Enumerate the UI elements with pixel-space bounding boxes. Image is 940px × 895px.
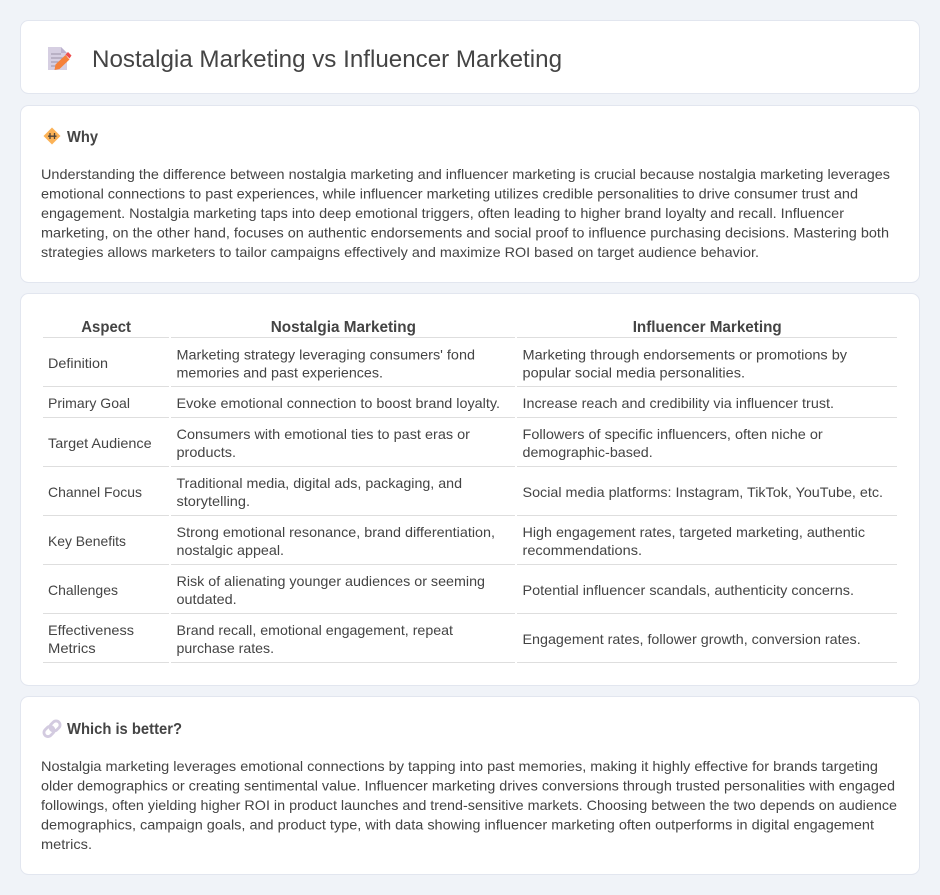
table row: channel focus: Channel Focus (48, 484, 142, 500)
table header row: Influencer Marketing (633, 319, 782, 336)
table row: key benefits: Key Benefits (48, 533, 126, 549)
table row: key benefits (43, 524, 897, 565)
table row: challenges: Challenges (48, 582, 118, 598)
table row: channel focus: storytelling. (176, 493, 250, 509)
table row: channel focus: Traditional media, digital ads, packaging, and (176, 475, 462, 491)
panel: why (20, 106, 920, 282)
table row: effectiveness metrics: Effectiveness (48, 622, 134, 638)
table row: definition: Marketing through endorsements or promotions by (522, 346, 847, 362)
table row: target audience: products. (176, 444, 236, 460)
table row: definition: memories and past experiences. (176, 364, 383, 380)
table row: challenges (43, 573, 897, 614)
table row: target audience: Target Audience (48, 435, 152, 451)
text block: why paragraph: marketing, on the other hand, focuses on authentic endorsements and social proof to influence purchasing decisions. Mastering both (41, 224, 889, 240)
text block: why paragraph: emotional connections to past experiences, while influencer marketing utilizes credible personalities to drive consumer trust and (41, 186, 858, 202)
table row: definition: Definition (48, 355, 108, 371)
text block: which is better paragraph: followings, often yielding higher ROI in product launches and trend-sensitive markets. Choosing between the two depends on audience (41, 797, 897, 813)
table row: key benefits: Strong emotional resonance, brand differentiation, (176, 524, 495, 540)
table row: effectiveness metrics: Engagement rates, follower growth, conversion rates. (522, 631, 861, 647)
table row: target audience: demographic-based. (522, 444, 653, 460)
table row: primary goal (43, 395, 897, 418)
table row: effectiveness metrics: Metrics (48, 640, 96, 656)
table row: effectiveness metrics: Brand recall, emotional engagement, repeat (176, 622, 453, 638)
table row: effectiveness metrics: purchase rates. (176, 640, 274, 656)
table row: channel focus: Social media platforms: Instagram, TikTok, YouTube, etc. (522, 484, 883, 500)
table row: definition (43, 346, 897, 387)
panel: comparison table (20, 294, 920, 686)
table row: primary goal: Primary Goal (48, 395, 130, 411)
table row: key benefits: High engagement rates, targeted marketing, authentic (522, 524, 865, 540)
text block: why paragraph: strategies allows marketers to tailor campaigns effectively and maximize ROI based on target audience behavior. (41, 244, 759, 260)
table header row: Nostalgia Marketing (271, 319, 416, 336)
panel: title header (20, 20, 920, 94)
text block: why paragraph: Understanding the difference between nostalgia marketing and influencer marketing is crucial because nostalgia marketing leverages (41, 166, 890, 182)
table row: primary goal: Increase reach and credibility via influencer trust. (522, 395, 834, 411)
table row: primary goal: Evoke emotional connection to boost brand loyalty. (176, 395, 500, 411)
icon: chain link (42, 719, 62, 738)
table row: definition: popular social media personalities. (522, 364, 745, 380)
text block: which is better paragraph: demographics, campaign goals, and product type, with data showing influencer marketing often outperforms in digital engagement (41, 816, 874, 832)
table row: target audience: Followers of specific influencers, often niche or (522, 426, 823, 442)
panel: which is better (20, 696, 920, 874)
text block: why paragraph: engagement. Nostalgia marketing taps into deep emotional triggers, often leading to higher brand loyalty and recall. Influencer (41, 205, 844, 221)
table row: target audience (43, 426, 897, 467)
text block: why paragraph (41, 166, 890, 260)
table row: target audience: Consumers with emotional ties to past eras or (176, 426, 470, 442)
text block: which is better paragraph: metrics. (41, 836, 92, 852)
table header row (43, 319, 897, 338)
table row: effectiveness metrics (43, 622, 897, 663)
table row: challenges: Potential influencer scandals, authenticity concerns. (522, 582, 854, 598)
table row: key benefits: nostalgic appeal. (176, 542, 284, 558)
table row: channel focus (43, 475, 897, 516)
table row: challenges: Risk of alienating younger audiences or seeming (176, 573, 485, 589)
table row: challenges: outdated. (176, 591, 237, 607)
icon: document with pencil (48, 47, 72, 70)
table row: definition: Marketing strategy leveraging consumers' fond (176, 346, 475, 362)
table header row: Aspect (81, 319, 131, 336)
text block: which is better paragraph (41, 758, 897, 852)
heading: which is better: Which is better? (67, 721, 182, 738)
icon: orange diamond sign (44, 128, 60, 144)
title: Nostalgia Marketing vs Influencer Marketing (92, 46, 562, 73)
text block: which is better paragraph: older demographics or creating sentimental value. Influencer marketing drives conversions through trusted personalities with engaged (41, 778, 895, 794)
heading: why: Why (67, 129, 98, 146)
text block: which is better paragraph: Nostalgia marketing leverages emotional connections by tapping into past memories, making it highly effective for brands targeting (41, 758, 878, 774)
table row: key benefits: recommendations. (522, 542, 642, 558)
